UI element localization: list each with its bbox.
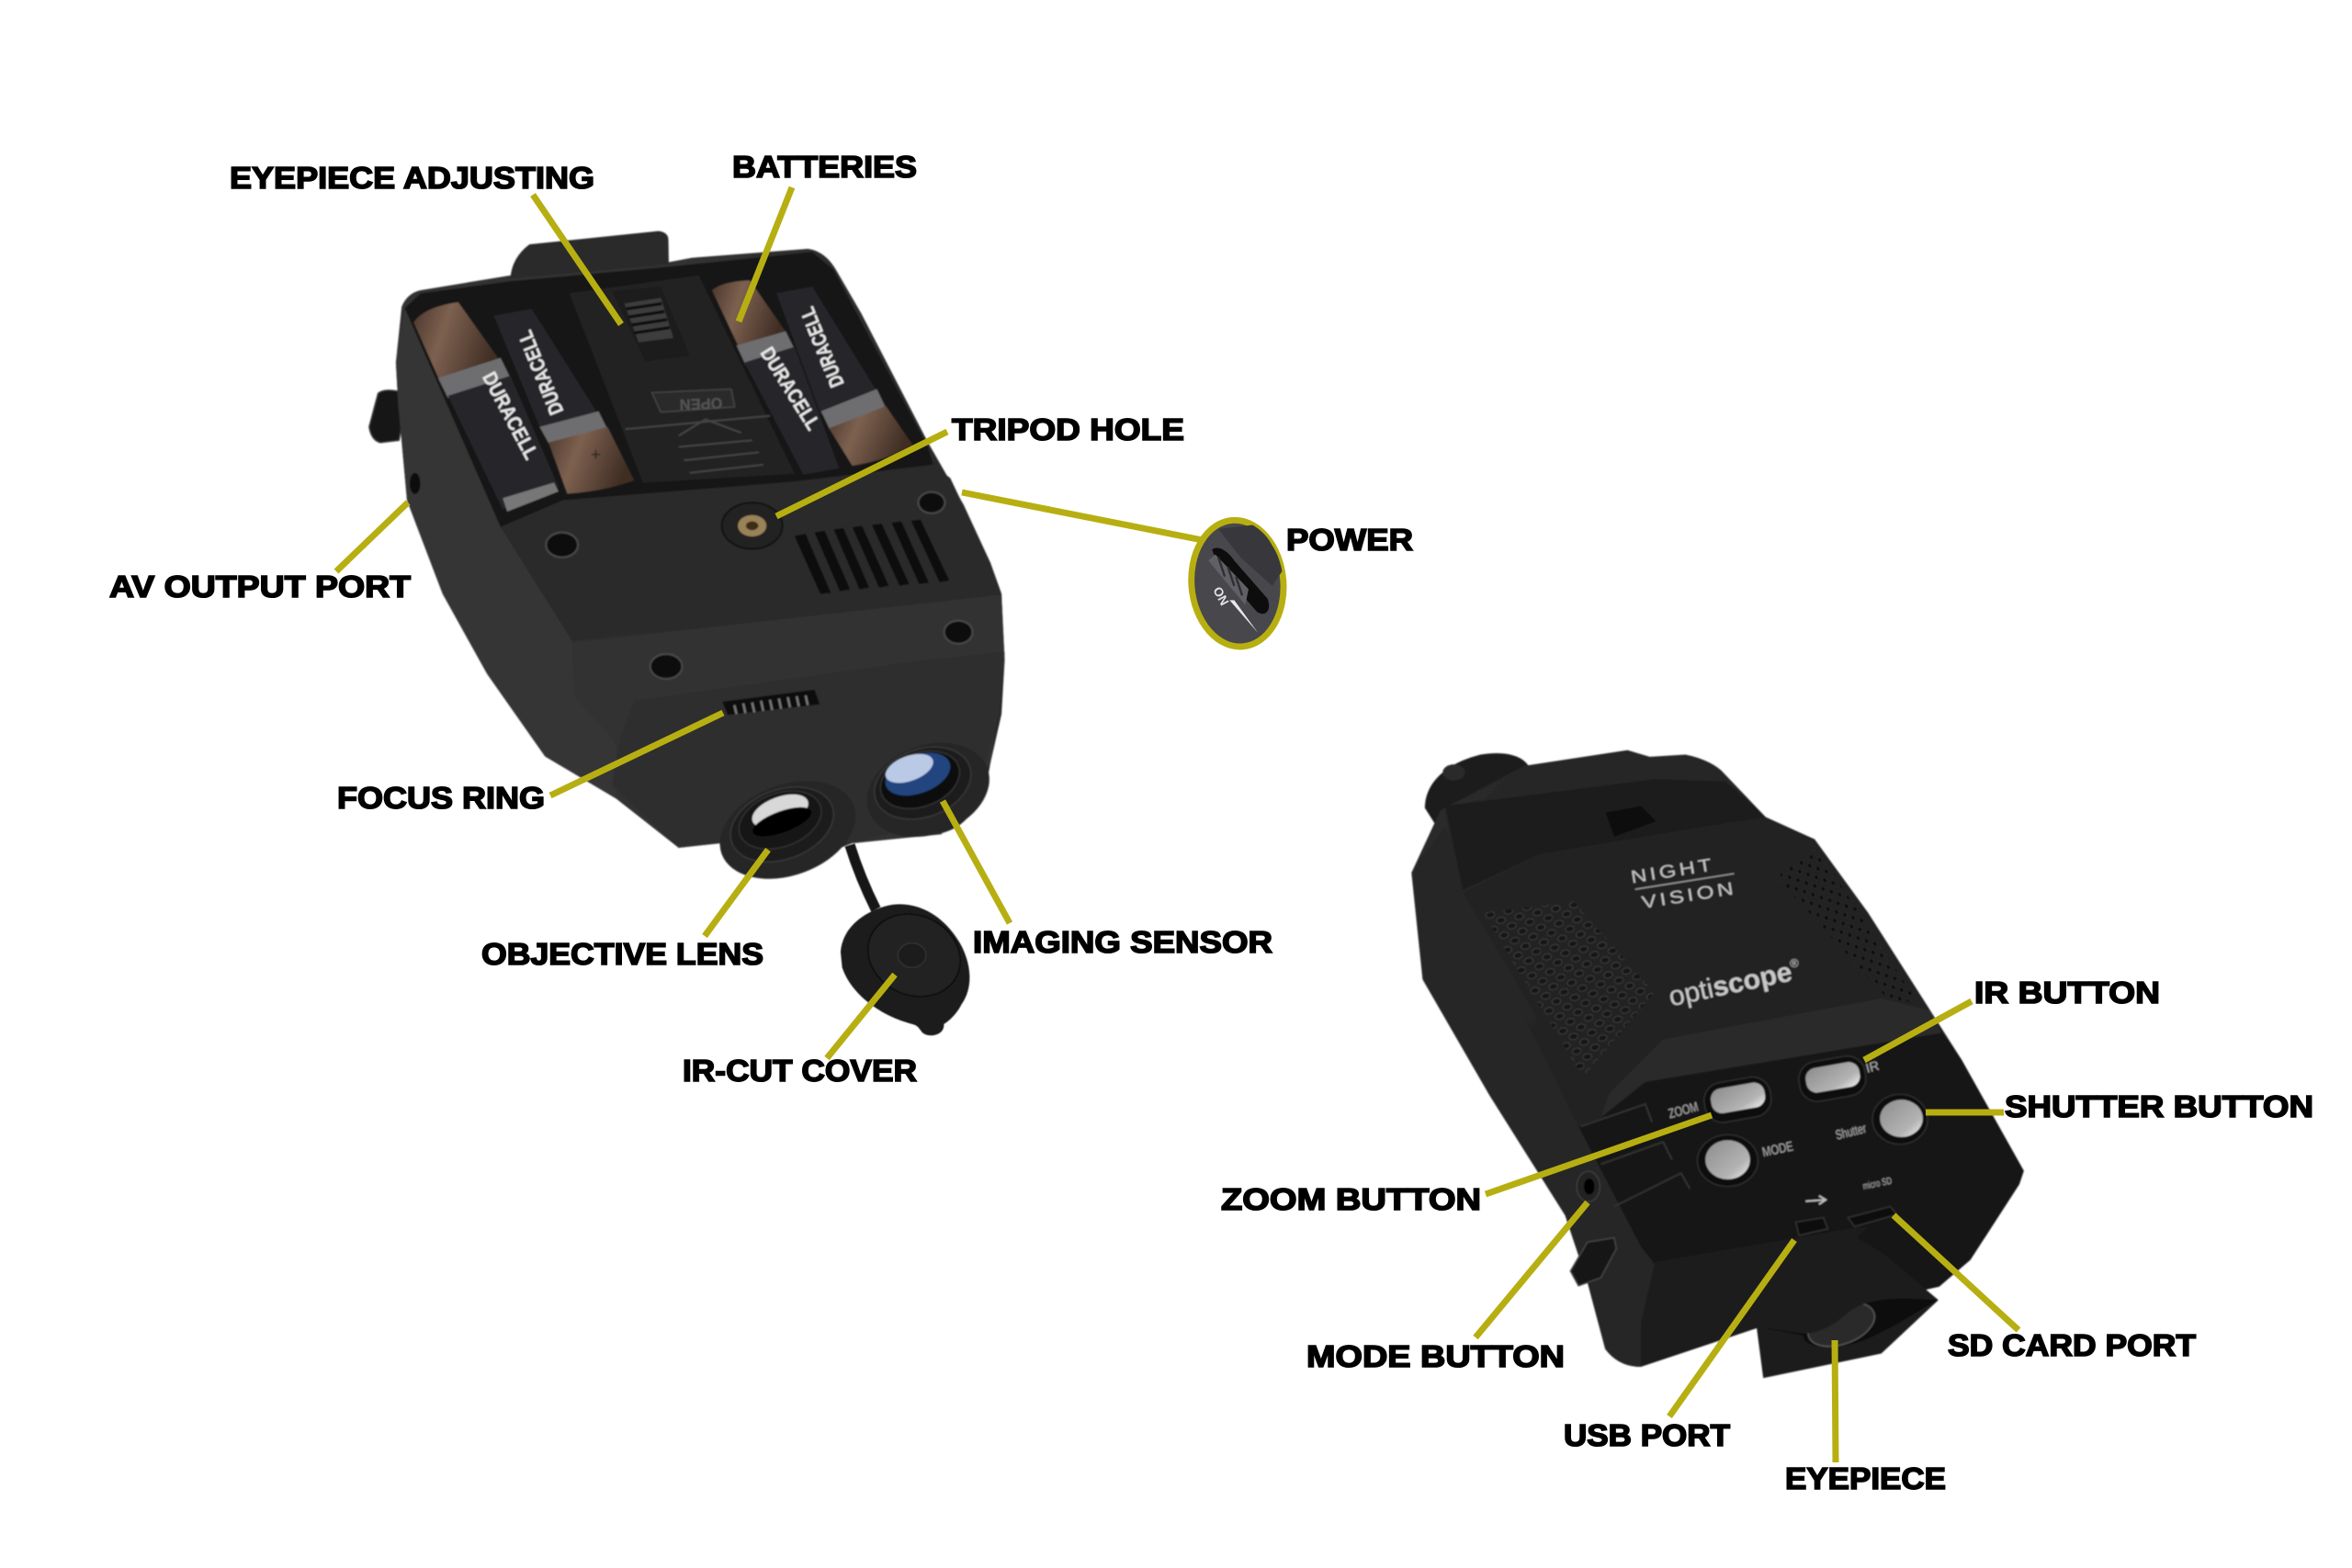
main body shell xyxy=(396,249,1004,874)
main body shell xyxy=(1411,750,2024,1367)
label: USB port: USB PORT xyxy=(1564,1418,1730,1452)
lower plate xyxy=(501,465,1001,648)
AV jack xyxy=(1577,1171,1600,1201)
leader: shutter button xyxy=(1926,1110,2004,1115)
label: eyepiece adjusting: EYEPIECE ADJUSTING xyxy=(230,161,594,195)
speaker vents xyxy=(795,520,949,594)
rubber eyecup upper hood xyxy=(1757,1237,1939,1334)
door arrow embossing xyxy=(626,416,770,473)
top plate xyxy=(1463,818,1930,1100)
tether xyxy=(850,845,876,909)
side face xyxy=(1411,828,1655,1367)
mode button xyxy=(1698,1134,1758,1187)
eyepiece adjusting slider xyxy=(612,287,690,362)
micro SD label: micro SD xyxy=(1861,1176,1893,1192)
label: SD card port: SD CARD PORT xyxy=(1948,1328,2196,1362)
battery door centre xyxy=(570,276,795,482)
label: eyepiece: EYEPIECE xyxy=(1785,1461,1946,1495)
leader: SD card port xyxy=(1894,1215,2018,1330)
leader: zoom button xyxy=(1486,1115,1712,1194)
front housing xyxy=(612,652,1004,848)
strap lug xyxy=(1570,1237,1616,1286)
leader: objective lens xyxy=(705,850,768,936)
lens cap with tether xyxy=(841,845,974,1035)
leader: batteries xyxy=(739,187,792,321)
vent slot xyxy=(1605,806,1657,837)
device photo: underside of night vision scope with battery compartment xyxy=(369,231,1004,897)
AV port xyxy=(410,473,421,494)
optiscope logo: ® xyxy=(1789,956,1801,971)
cap inner xyxy=(854,899,974,1011)
leader: eyepiece adjusting xyxy=(533,195,621,324)
label: imaging sensor: IMAGING SENSOR xyxy=(973,925,1272,959)
plus mark: + xyxy=(591,445,601,465)
SD card port xyxy=(1848,1206,1897,1226)
label: shutter button: SHUTTER BUTTON xyxy=(2005,1089,2313,1123)
shutter button xyxy=(1872,1094,1928,1145)
label: batteries: BATTERIES xyxy=(732,150,917,184)
battery 2 label: DURACELL xyxy=(514,327,568,418)
OPEN mark: OPEN xyxy=(679,394,723,412)
battery 3 label: DURACELL xyxy=(756,343,825,434)
cap nub xyxy=(898,943,926,967)
device photo: top of night vision scope with controls xyxy=(1411,750,2024,1378)
label: IR-cut cover: IR-CUT COVER xyxy=(683,1054,917,1088)
zoom button xyxy=(1702,1074,1774,1125)
label: power: POWER xyxy=(1286,523,1413,557)
label: zoom button: ZOOM BUTTON xyxy=(1221,1182,1481,1216)
rubber eyecup lower lip xyxy=(1757,1300,1939,1378)
eyepiece knob xyxy=(1425,753,1530,832)
eyepiece glass xyxy=(1802,1294,1881,1355)
right lens barrel xyxy=(854,727,1002,853)
battery 4 xyxy=(776,287,912,466)
screw holes xyxy=(546,492,973,679)
MODE label: MODE xyxy=(1761,1139,1795,1160)
label: tripod hole: TRIPOD HOLE xyxy=(952,412,1184,446)
label: IR button: IR BUTTON xyxy=(1974,976,2160,1010)
power switch inset xyxy=(1186,516,1289,650)
front block xyxy=(571,595,1004,848)
left speaker grille xyxy=(1483,901,1655,1077)
inset contents xyxy=(1208,525,1285,633)
rear band xyxy=(1445,779,1766,890)
NIGHT VISION logo: NIGHT xyxy=(1630,854,1716,887)
leader: tripod hole xyxy=(776,432,947,516)
battery 1 label: DURACELL xyxy=(478,368,543,463)
label: objective lens: OBJECTIVE LENS xyxy=(481,937,763,971)
ZOOM label: ZOOM xyxy=(1667,1100,1700,1122)
battery 1 xyxy=(413,302,559,512)
leader: USB port xyxy=(1669,1240,1794,1416)
focus wheel xyxy=(722,690,820,715)
battery 4 label: DURACELL xyxy=(796,303,849,390)
leader: IR-cut cover xyxy=(827,975,895,1058)
side grip ridges xyxy=(1581,1104,1690,1206)
leader: focus ring xyxy=(550,713,723,795)
leader: power xyxy=(962,492,1203,540)
eyepiece adjusting tab xyxy=(510,231,669,278)
OPEN mark xyxy=(652,389,735,412)
USB port xyxy=(1796,1218,1828,1235)
battery 2 xyxy=(494,309,634,493)
control panel xyxy=(1578,1032,2024,1262)
leader: eyepiece xyxy=(1835,1340,1836,1462)
inset contents: ON xyxy=(1210,584,1231,608)
IR label: IR xyxy=(1864,1059,1881,1077)
side face xyxy=(396,309,616,798)
battery 3 xyxy=(712,280,839,475)
left lens barrel xyxy=(707,763,869,897)
control panel bevel xyxy=(1600,998,1941,1118)
optiscope logo: optiscope xyxy=(1667,957,1794,1012)
battery compartment xyxy=(405,252,933,527)
NIGHT VISION logo: VISION xyxy=(1640,878,1738,913)
tripod hole xyxy=(722,502,783,549)
leader: mode button xyxy=(1476,1202,1588,1337)
knob pin xyxy=(1442,764,1465,781)
cap flange xyxy=(841,904,969,1035)
leader: AV output port xyxy=(336,502,408,571)
side strap lug xyxy=(369,390,407,443)
label: mode button: MODE BUTTON xyxy=(1306,1339,1565,1373)
eyecup inner cavity xyxy=(1757,1285,1939,1378)
leader: imaging sensor xyxy=(943,801,1010,923)
right speaker grille xyxy=(1777,848,1917,1002)
inset disc xyxy=(1186,516,1289,650)
leader: IR button xyxy=(1864,1001,1972,1060)
label: focus ring: FOCUS RING xyxy=(337,781,545,815)
USB symbol xyxy=(1805,1196,1826,1204)
IR button xyxy=(1796,1054,1869,1104)
label: AV output port: AV OUTPUT PORT xyxy=(109,570,411,604)
NIGHT VISION logo xyxy=(1630,852,1738,914)
Shutter label: Shutter xyxy=(1834,1122,1868,1144)
